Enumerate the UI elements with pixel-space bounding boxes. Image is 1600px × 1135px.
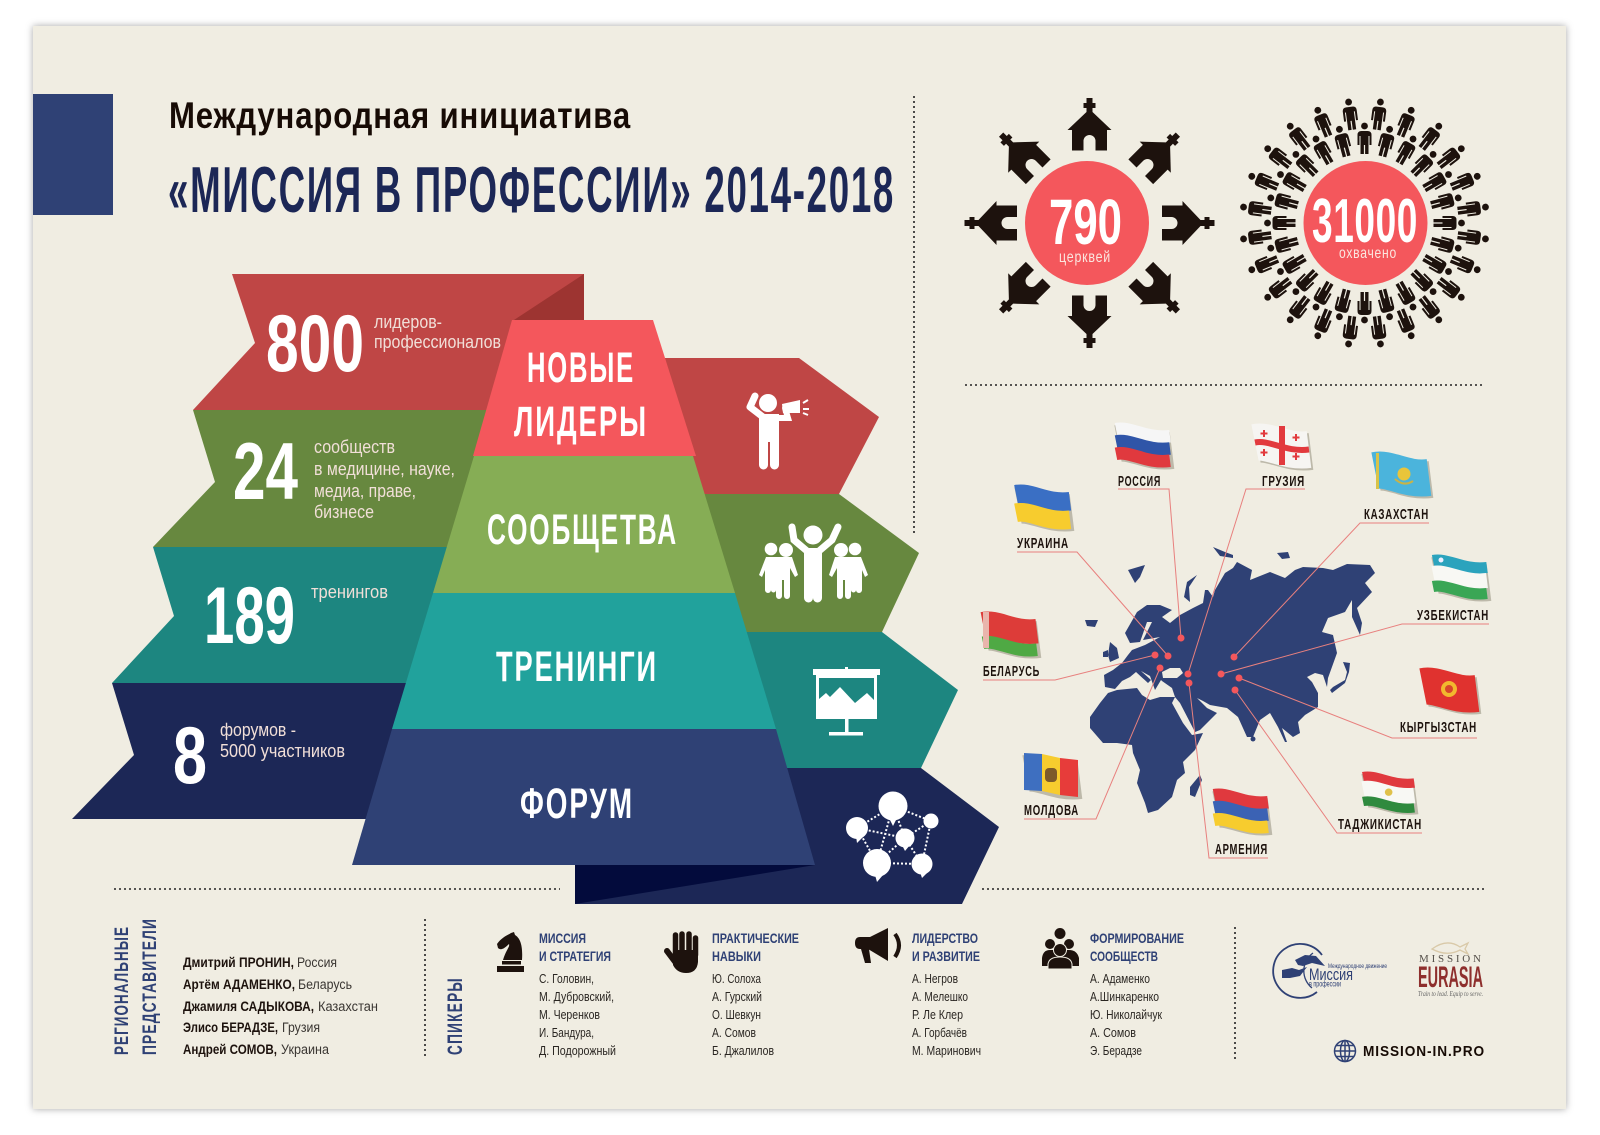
tier: trainings: ТРЕНИНГИ xyxy=(496,643,658,691)
speakers: community building: Э. Берадзе xyxy=(1090,1044,1142,1058)
tier: communities: СООБЩЕТВА xyxy=(487,506,678,554)
band: 8 forums: форумов - xyxy=(220,720,296,740)
list: regional representatives: Грузия xyxy=(282,1020,320,1035)
list: regional representatives: Дмитрий ПРОНИН, xyxy=(183,955,294,970)
heading: regional representatives: ПРЕДСТАВИТЕЛИ xyxy=(140,918,161,1055)
country labels: БЕЛАРУСЬ xyxy=(983,663,1040,680)
country labels: АРМЕНИЯ xyxy=(1215,841,1268,858)
country dots xyxy=(1152,634,1242,694)
heading: regional representatives: РЕГИОНАЛЬНЫЕ xyxy=(112,926,133,1055)
stat: 790 churches: церквей xyxy=(1059,249,1111,266)
tier: new leaders: ЛИДЕРЫ xyxy=(514,398,648,446)
stat: 790 churches xyxy=(964,98,1214,348)
stat: 31000 reached xyxy=(1239,98,1490,348)
tier: communities xyxy=(433,456,735,593)
band: 24 communities: сообществ xyxy=(314,437,395,457)
band: 800 leaders: 800 xyxy=(266,299,364,389)
speakers: leadership and development: А. Мелешко xyxy=(912,990,968,1004)
tier: forum: ФОРУМ xyxy=(520,780,634,828)
speakers: community building xyxy=(1090,931,1184,1058)
flag: Moldova xyxy=(1024,753,1080,797)
list: regional representatives: Элисо БЕРАДЗЕ, xyxy=(183,1020,278,1035)
blue corner block xyxy=(33,94,113,215)
speakers: mission and strategy xyxy=(539,931,616,1058)
title xyxy=(168,95,895,226)
icon: hand xyxy=(667,934,698,973)
country labels: ТАДЖИКИСТАН xyxy=(1338,816,1422,833)
title: «МИССИЯ В ПРОФЕССИИ» 2014-2018 xyxy=(168,153,895,226)
stat: 31000 reached: 31000 xyxy=(1312,187,1418,256)
flag: Kazakhstan xyxy=(1375,453,1431,489)
stat: 790 churches: 790 xyxy=(1049,186,1122,258)
speakers: community building: СООБЩЕСТВ xyxy=(1090,949,1158,964)
band: 189 trainings: 189 xyxy=(204,571,295,661)
speakers: practical skills: А. Сомов xyxy=(712,1026,756,1040)
tier: new leaders: НОВЫЕ xyxy=(527,344,635,392)
country labels xyxy=(983,473,1489,858)
flag: Kyrgyzstan xyxy=(1423,681,1479,697)
heading: speakers: СПИКЕРЫ xyxy=(444,977,467,1055)
logo: Mission in Profession: Миссия xyxy=(1309,965,1353,984)
icon: chess knight xyxy=(497,932,524,972)
pyramid: left statistic bands xyxy=(72,274,584,819)
logo: Mission Eurasia xyxy=(1418,943,1483,998)
speakers: mission and strategy: И. Бандура, xyxy=(539,1026,594,1040)
list: regional representatives xyxy=(183,955,378,1057)
speakers: leadership and development: И РАЗВИТИЕ xyxy=(912,949,980,964)
speakers: community building: ФОРМИРОВАНИЕ xyxy=(1090,931,1184,946)
website with globe icon: MISSION-IN.PRO xyxy=(1363,1043,1485,1060)
speakers: community building: А.Шинкаренко xyxy=(1090,990,1159,1004)
infographic canvas: EURASIA xyxy=(1418,961,1483,994)
country labels: МОЛДОВА xyxy=(1024,802,1079,819)
stat: 31000 reached: охвачено xyxy=(1339,245,1397,262)
speakers: community building: А. Адаменко xyxy=(1090,972,1150,986)
speakers: leadership and development xyxy=(912,931,981,1058)
speakers: mission and strategy: С. Головин, xyxy=(539,972,594,986)
country labels: УКРАИНА xyxy=(1017,535,1069,552)
icon: community group xyxy=(1042,928,1079,969)
speakers: mission and strategy: Д. Подорожный xyxy=(539,1044,616,1058)
band: 8 forums xyxy=(72,683,420,819)
logo: Mission Eurasia: MISSION xyxy=(1419,953,1481,965)
country labels: ГРУЗИЯ xyxy=(1262,473,1305,490)
country labels: РОССИЯ xyxy=(1118,473,1161,490)
world map: Eurasia and Africa xyxy=(1085,547,1375,813)
country leader lines xyxy=(983,489,1489,858)
band: 24 communities xyxy=(153,410,500,547)
band: 800 leaders: лидеров- xyxy=(374,312,442,332)
speakers: leadership and development: М. Маринович xyxy=(912,1044,981,1058)
list: regional representatives: Джамиля САДЫКОВА, xyxy=(183,999,314,1014)
pyramid: centre tiers xyxy=(352,320,815,865)
band: 24 communities: 24 xyxy=(233,427,298,517)
speakers: practical skills: Б. Джалилов xyxy=(712,1044,774,1058)
tier: new leaders xyxy=(473,320,696,456)
speakers: leadership and development: А. Горбачёв xyxy=(912,1026,967,1040)
flag: Belarus xyxy=(983,612,1039,650)
country labels: КАЗАХСТАН xyxy=(1364,506,1429,523)
logo: Mission in Profession: в профессии xyxy=(1309,980,1341,988)
speakers: leadership and development: ЛИДЕРСТВО xyxy=(912,931,978,946)
band: 800 leaders xyxy=(193,274,584,410)
list: regional representatives: Артём АДАМЕНКО, xyxy=(183,977,295,992)
list: regional representatives: Беларусь xyxy=(298,977,352,992)
speakers: practical skills xyxy=(712,931,799,1058)
icon: megaphone xyxy=(855,928,899,963)
band: 8 forums: 8 xyxy=(173,711,207,801)
logo: Mission in Profession xyxy=(1273,944,1388,998)
flag: Tajikistan xyxy=(1363,776,1416,808)
speakers: practical skills: А. Гурский xyxy=(712,990,762,1004)
flag: Ukraine xyxy=(1016,494,1072,520)
heading: regional representatives xyxy=(112,918,161,1055)
speakers: mission and strategy: МИССИЯ xyxy=(539,931,586,946)
flag: Uzbekistan xyxy=(1433,558,1489,594)
flag: Russia xyxy=(1116,429,1172,461)
band: 24 communities: медиа, праве, xyxy=(314,481,416,501)
title: Международная инициатива xyxy=(169,95,631,136)
dotted dividers xyxy=(114,96,1485,1060)
list: regional representatives: Казахстан xyxy=(318,999,378,1014)
speakers: leadership and development: А. Негров xyxy=(912,972,958,986)
speakers: community building: Ю. Николайчук xyxy=(1090,1008,1162,1022)
flag: Georgia xyxy=(1255,426,1311,465)
speakers: practical skills: ПРАКТИЧЕСКИЕ xyxy=(712,931,799,946)
country labels: КЫРГЫЗСТАН xyxy=(1400,719,1477,736)
band: 189 trainings: тренингов xyxy=(311,582,388,602)
website with globe icon xyxy=(1334,1040,1485,1062)
band: presentation screen icon xyxy=(720,632,958,768)
country labels: УЗБЕКИСТАН xyxy=(1417,607,1489,624)
speakers: practical skills: О. Шевкун xyxy=(712,1008,761,1022)
tier: forum xyxy=(352,729,815,865)
tier: trainings xyxy=(392,593,776,729)
band: 24 communities: в медицине, науке, xyxy=(314,459,455,479)
list: regional representatives: Украина xyxy=(281,1042,329,1057)
speakers: mission and strategy: М. Дубровский, xyxy=(539,990,614,1004)
speakers: mission and strategy: И СТРАТЕГИЯ xyxy=(539,949,611,964)
band: 189 trainings xyxy=(112,547,460,683)
band: 8 forums: 5000 участников xyxy=(220,741,345,761)
speakers: practical skills: Ю. Солоха xyxy=(712,972,761,986)
list: regional representatives: Россия xyxy=(297,955,337,970)
logo: Mission Eurasia: Train to lead. Equip to serve. xyxy=(1418,990,1483,998)
speakers: practical skills: НАВЫКИ xyxy=(712,949,761,964)
speakers: leadership and development: Р. Ле Клер xyxy=(912,1008,963,1022)
speakers: community building: А. Сомов xyxy=(1090,1026,1136,1040)
speakers: mission and strategy: М. Черенков xyxy=(539,1008,600,1022)
band: community icon xyxy=(680,494,919,632)
band: forum network icon xyxy=(575,768,999,904)
band: 24 communities: бизнесе xyxy=(314,502,374,522)
flag: Armenia xyxy=(1214,795,1270,827)
band: leader icon xyxy=(640,358,879,494)
band: 800 leaders: профессионалов xyxy=(374,332,501,352)
pyramid: right icon bands xyxy=(575,358,999,904)
list: regional representatives: Андрей СОМОВ, xyxy=(183,1042,277,1057)
logo: Mission in Profession: Международное движение xyxy=(1328,964,1388,970)
